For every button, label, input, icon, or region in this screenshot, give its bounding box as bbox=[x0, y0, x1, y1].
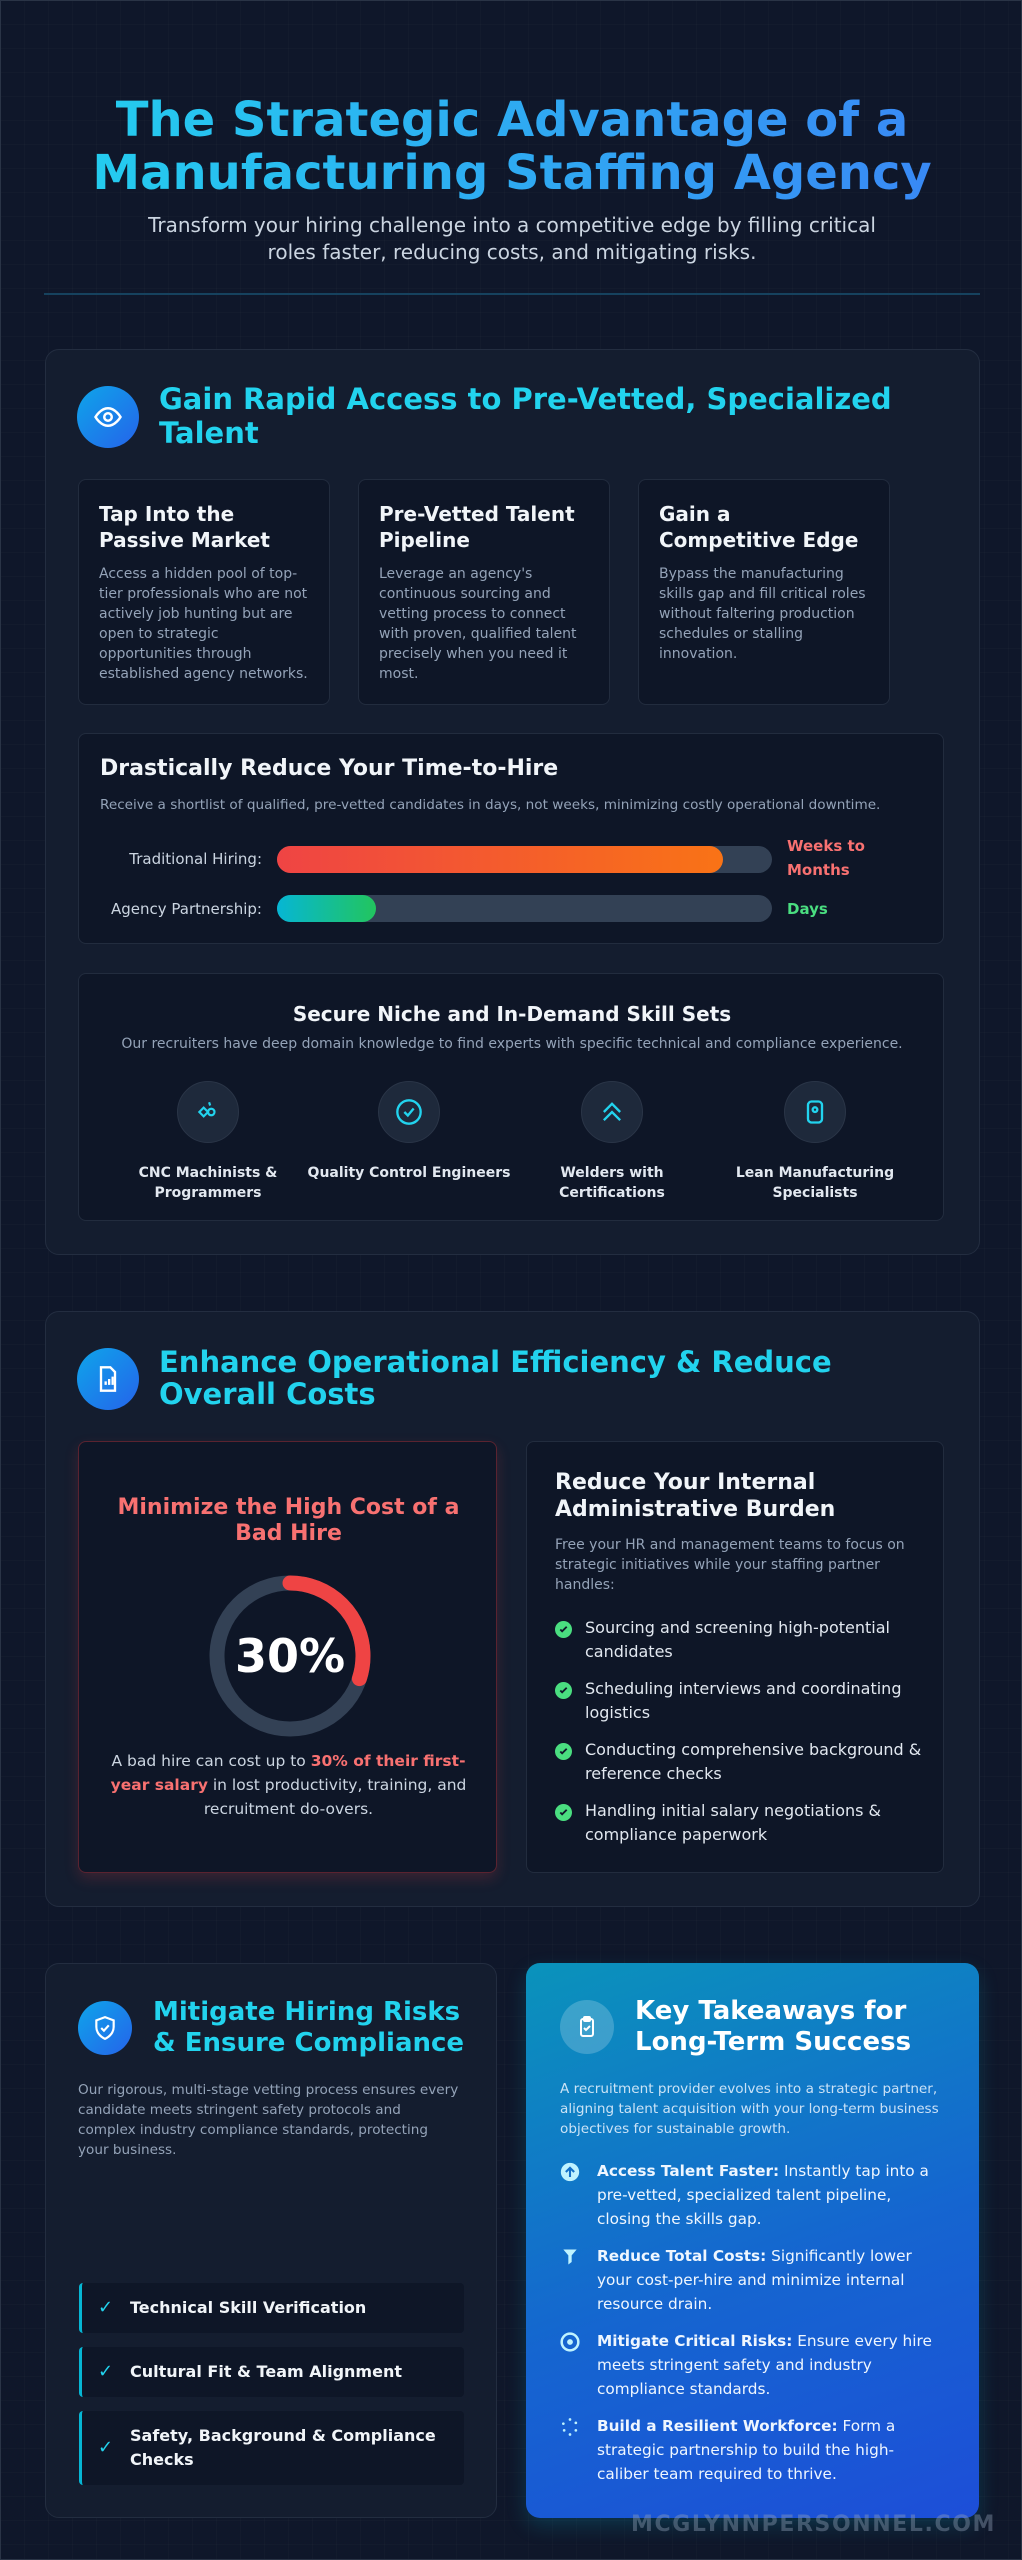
icon: quality control bbox=[308, 1081, 510, 1181]
checklist item: Technical Skill Verification bbox=[130, 2298, 366, 2317]
checklist item: Safety, Background & Compliance Checks bbox=[130, 2426, 436, 2469]
bar: agency bbox=[111, 895, 828, 922]
text: vetting description bbox=[78, 2082, 458, 2158]
heading: takeaways: Long-Term Success bbox=[635, 2027, 911, 2057]
card: competitive edge: Bypass the manufacturing skills gap and fill critical roles without faltering production schedules or stalling innovation. bbox=[659, 566, 866, 662]
title: Manufacturing Staffing Agency bbox=[92, 145, 932, 201]
list: takeaways: closing the skills gap. bbox=[597, 2210, 762, 2228]
checklist item: Cultural Fit & Team Alignment bbox=[130, 2362, 402, 2381]
list: takeaways: Mitigate Critical Risks: Ensure every hire bbox=[597, 2332, 932, 2350]
heading: skill sets: Secure Niche and In-Demand Skill Sets bbox=[293, 1002, 731, 1026]
text: vetting description: complex industry compliance standards, protecting bbox=[78, 2122, 428, 2138]
card: admin burden: Handling initial salary negotiations & compliance paperwork bbox=[585, 1801, 881, 1844]
card: passive market: Access a hidden pool of top-tier professionals who are not actively job hunting but are open to strategic opportunities through established agency networks. bbox=[99, 566, 308, 682]
card: admin burden bbox=[526, 1441, 944, 1873]
icon: CNC machinists bbox=[139, 1081, 277, 1201]
card: admin burden: Sourcing and screening high-potential candidates bbox=[585, 1618, 890, 1660]
subtitle bbox=[148, 213, 876, 264]
list: takeaways: Reduce Total Costs: Significantly lower bbox=[597, 2247, 912, 2265]
bar: traditional bbox=[129, 837, 865, 879]
card: pipeline: Leverage an agency's continuous sourcing and vetting process to connect with proven, qualified talent precisely when you need it most. bbox=[379, 566, 577, 682]
card: pipeline bbox=[358, 479, 610, 705]
checklist item bbox=[79, 2347, 464, 2397]
list: takeaways: pre-vetted, specialized talent pipeline, bbox=[597, 2186, 891, 2204]
heading: efficiency: Enhance Operational Efficiency & Reduce Overall Costs bbox=[159, 1345, 832, 1411]
card: admin burden: Free your HR and management teams to focus on strategic initiatives while your staffing partner handles: bbox=[555, 1537, 905, 1593]
text: bad hire stat: A bad hire can cost up to 30% of their first-year salary in lost productivity, training, and recruitment do-overs. bbox=[111, 1752, 466, 1818]
icon: clipboard bbox=[560, 2000, 614, 2054]
card: passive market bbox=[78, 479, 330, 705]
list: takeaways: your cost-per-hire and minimize internal bbox=[597, 2271, 905, 2289]
heading: takeaways bbox=[635, 1996, 911, 2057]
list: takeaways: strategic partnership to build the high- bbox=[597, 2441, 894, 2459]
heading: rapid access: Gain Rapid Access to Pre-Vetted, Specialized Talent bbox=[159, 382, 892, 450]
card: passive market: Tap Into the Passive Market bbox=[99, 502, 270, 552]
icon: quality control: Quality Control Engineers bbox=[308, 1165, 510, 1181]
text: takeaways intro: A recruitment provider evolves into a strategic partner, aligning talent acquisition with your long-term business objectives for sustainable growth. bbox=[560, 2081, 939, 2137]
list: takeaways bbox=[560, 2162, 932, 2483]
bar: traditional: Months bbox=[787, 861, 850, 879]
bar: agency: Agency Partnership: bbox=[111, 900, 262, 918]
icon: document chart bbox=[77, 1348, 139, 1410]
checklist item: ✓ bbox=[98, 2361, 113, 2382]
text: vetting description: candidate meets stringent safety protocols and bbox=[78, 2102, 401, 2118]
list: takeaways: Access Talent Faster: Instantly tap into a bbox=[597, 2162, 929, 2180]
icon: eye bbox=[77, 386, 139, 448]
panel: time-to-hire chart bbox=[78, 733, 944, 944]
icon: lean manufacturing: Lean Manufacturing Specialists bbox=[736, 1165, 894, 1201]
heading: mitigate: Mitigate Hiring Risks bbox=[153, 1997, 460, 2027]
panel: key takeaways bbox=[526, 1963, 979, 2518]
checklist item bbox=[79, 2283, 464, 2333]
panel: niche skill sets bbox=[78, 973, 944, 1221]
list: takeaways: meets stringent safety and industry bbox=[597, 2356, 872, 2374]
card: bad hire cost bbox=[78, 1441, 497, 1873]
title bbox=[1, 94, 1022, 200]
icon: shield bbox=[78, 2001, 132, 2055]
heading: bad hire: Minimize the High Cost of a Bad Hire bbox=[118, 1495, 460, 1546]
text: vetting description: Our rigorous, multi-stage vetting process ensures every bbox=[78, 2082, 458, 2098]
text: time description: Receive a shortlist of qualified, pre-vetted candidates in days, not weeks, minimizing costly operational downtime. bbox=[100, 797, 880, 813]
card: admin burden: Scheduling interviews and coordinating logistics bbox=[585, 1679, 901, 1722]
icon: welders bbox=[559, 1081, 665, 1201]
chart: donut 30% bbox=[210, 1576, 370, 1736]
panel: rapid access to talent bbox=[45, 349, 980, 1255]
card: competitive edge bbox=[638, 479, 890, 705]
bar: agency: Days bbox=[787, 900, 828, 918]
icon: CNC machinists: CNC Machinists & Programmers bbox=[139, 1165, 277, 1201]
text: skill description: Our recruiters have deep domain knowledge to find experts with specific technical and compliance experience. bbox=[121, 1036, 903, 1052]
checklist item: ✓ bbox=[98, 2437, 113, 2458]
list: takeaways: compliance standards. bbox=[597, 2380, 770, 2398]
title: The Strategic Advantage of a bbox=[116, 92, 908, 148]
heading: mitigate: & Ensure Compliance bbox=[153, 2028, 464, 2058]
card: admin burden: Reduce Your Internal Administrative Burden bbox=[555, 1470, 835, 1522]
icon: lean manufacturing bbox=[736, 1081, 894, 1201]
bar: traditional: Traditional Hiring: bbox=[129, 850, 262, 868]
panel: efficiency & costs bbox=[45, 1311, 980, 1907]
list: takeaways: resource drain. bbox=[597, 2295, 712, 2313]
heading: takeaways: Key Takeaways for bbox=[635, 1996, 906, 2026]
subtitle: roles faster, reducing costs, and mitigating risks. bbox=[268, 240, 756, 264]
card: competitive edge: Gain a Competitive Edge bbox=[659, 502, 858, 552]
subtitle: Transform your hiring challenge into a competitive edge by filling critical bbox=[148, 213, 876, 237]
text: vetting description: your business. bbox=[78, 2142, 176, 2158]
card: pipeline: Pre-Vetted Talent Pipeline bbox=[379, 502, 575, 552]
bar: traditional: Weeks to bbox=[787, 837, 865, 855]
chart: donut 30%: 30% bbox=[235, 1629, 345, 1683]
icon: welders: Welders with Certifications bbox=[559, 1165, 665, 1201]
watermark: MCGLYNNPERSONNEL.COM bbox=[631, 2512, 996, 2537]
list: takeaways: caliber team required to thrive. bbox=[597, 2465, 837, 2483]
panel: mitigate risks bbox=[45, 1963, 497, 2518]
checklist item bbox=[79, 2411, 464, 2485]
heading: time to hire: Drastically Reduce Your Time-to-Hire bbox=[100, 756, 558, 781]
heading: mitigate bbox=[153, 1997, 464, 2058]
checklist item: ✓ bbox=[98, 2297, 113, 2318]
card: admin burden: Conducting comprehensive background & reference checks bbox=[585, 1740, 921, 1782]
list: takeaways: Build a Resilient Workforce: Form a bbox=[597, 2417, 895, 2435]
